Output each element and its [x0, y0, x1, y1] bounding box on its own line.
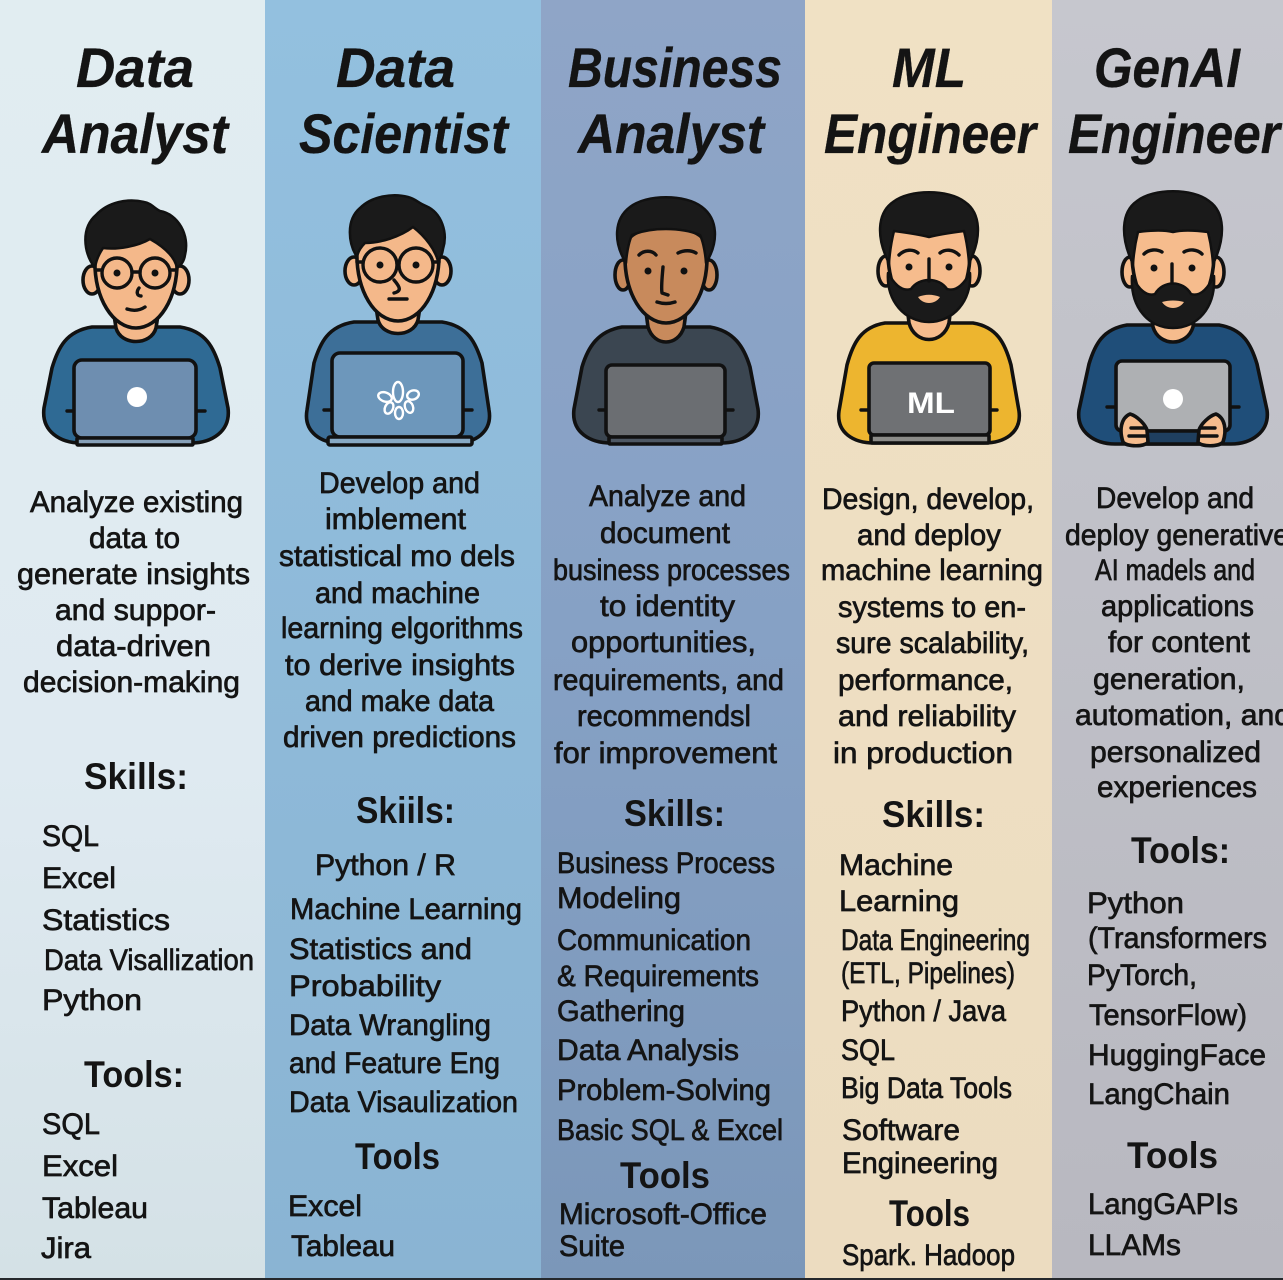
column background — [541, 0, 805, 1280]
heading: GenAI Engineer: GenAI — [1094, 36, 1241, 99]
description: recommendsl — [577, 700, 751, 733]
skills list: Communication — [557, 924, 751, 957]
description: in production — [833, 737, 1013, 770]
skills list: (ETL, Pipelines) — [841, 957, 1015, 990]
description: Develop and — [319, 467, 480, 500]
tools list — [559, 1155, 767, 1263]
heading: Data Analyst — [40, 36, 230, 165]
tools list one — [1087, 830, 1267, 1111]
skills list: Skills: — [624, 793, 725, 834]
description: for improvement — [554, 737, 778, 770]
tools list — [842, 1193, 1015, 1272]
tools list one: HuggingFace — [1088, 1039, 1266, 1072]
description: systems to en- — [838, 591, 1026, 624]
laptop label: ML: ML — [907, 387, 955, 420]
skills list: Data Analysis — [557, 1034, 739, 1067]
heading: ML Engineer: Engineer — [824, 102, 1039, 165]
heading: Business Analyst: Business — [568, 36, 782, 99]
heading: Business Analyst: Analyst — [576, 102, 766, 165]
icon: analyst with laptop — [44, 201, 228, 445]
description: data-driven — [56, 630, 211, 663]
description: to identity — [600, 590, 735, 623]
description — [279, 467, 523, 754]
tools list: Suite — [559, 1230, 625, 1263]
column background — [265, 0, 541, 1280]
skills list: Business Process — [557, 847, 775, 880]
description: driven predictions — [283, 721, 516, 754]
tools list: Tools — [620, 1155, 710, 1196]
tools list: Tools — [355, 1136, 440, 1177]
description: and make data — [305, 685, 494, 718]
description: decision-making — [23, 666, 240, 699]
tools list: Spark. Hadoop — [842, 1239, 1015, 1272]
description: learning elgorithms — [281, 612, 523, 645]
skills list — [42, 756, 254, 1017]
skills list: Data Engineering — [841, 924, 1030, 957]
tools list: Tools: — [84, 1054, 184, 1095]
description: machine learning — [821, 554, 1043, 587]
column background — [805, 0, 1052, 1280]
tools list one: Tools: — [1131, 830, 1230, 871]
description: data to — [89, 522, 180, 555]
tools list one: (Transformers — [1088, 922, 1267, 955]
tools list one: LangChain — [1088, 1078, 1230, 1111]
skills list: SQL — [841, 1034, 895, 1067]
tools list: Tableau — [42, 1192, 148, 1225]
tools list two — [1088, 1135, 1238, 1262]
description: experiences — [1097, 771, 1257, 804]
skills list: Engineering — [842, 1147, 998, 1180]
skills list: & Requirements — [557, 960, 759, 993]
description: statistical mo dels — [279, 540, 515, 573]
skills list: Python / R — [315, 849, 456, 882]
panel: Business Analyst — [541, 0, 805, 1280]
panel: Data Scientist — [265, 0, 541, 1280]
description: and reliability — [838, 700, 1016, 733]
skills list — [557, 793, 783, 1147]
heading: GenAI Engineer — [1068, 36, 1283, 165]
description: opportunities, — [571, 626, 756, 659]
heading: Business Analyst — [568, 36, 782, 165]
tools list one: PyTorch, — [1087, 959, 1197, 992]
tools list two: LLAMs — [1088, 1229, 1181, 1262]
skills list: SQL — [42, 820, 99, 853]
description: document — [600, 517, 731, 550]
description: for content — [1108, 626, 1251, 659]
description: and suppor- — [55, 594, 216, 627]
heading: Data Analyst: Data — [76, 36, 194, 99]
skills list: Problem-Solving — [557, 1074, 771, 1107]
tools list: Excel — [42, 1150, 118, 1183]
skills list: Modeling — [557, 882, 681, 915]
skills list: Machine — [839, 849, 953, 882]
tools list — [41, 1054, 184, 1265]
skills list: Skills: — [882, 794, 985, 835]
tools list: Jira — [41, 1232, 91, 1265]
description: imblement — [325, 503, 467, 536]
skills list: Skiils: — [356, 790, 455, 831]
icon: GenAI engineer with tablet — [1079, 191, 1267, 446]
description: generation, — [1093, 663, 1245, 696]
skills list: Skills: — [84, 756, 188, 797]
tools list — [288, 1136, 440, 1263]
icon: business analyst with laptop — [574, 197, 758, 444]
description: AI madels and — [1095, 554, 1255, 587]
skills list — [289, 790, 522, 1119]
description: Analyze and — [589, 480, 746, 513]
panel: ML Engineer — [805, 0, 1052, 1280]
skills list: Machine Learning — [290, 893, 522, 926]
description: and machine — [315, 577, 480, 610]
description: Analyze existing — [30, 486, 243, 519]
tools list: Tableau — [291, 1230, 395, 1263]
icon: scientist with laptop — [306, 195, 490, 445]
skills list: Data Visaulization — [289, 1086, 518, 1119]
skills list: Python — [42, 984, 142, 1017]
description: sure scalability, — [836, 627, 1029, 660]
panel: GenAI Engineer — [1052, 0, 1283, 1280]
description — [821, 483, 1043, 770]
heading: ML Engineer — [824, 36, 1039, 165]
skills list: Data Visallization — [44, 944, 254, 977]
skills list: Gathering — [557, 995, 685, 1028]
skills list: Statistics — [42, 904, 170, 937]
icon: atom logo on laptop — [377, 382, 420, 419]
icon: ML engineer with laptop — [839, 192, 1019, 443]
description: business processes — [553, 554, 790, 587]
description: performance, — [838, 664, 1013, 697]
description: personalized — [1090, 736, 1261, 769]
skills list: Big Data Tools — [841, 1072, 1012, 1105]
heading: Data Scientist: Data — [336, 36, 455, 99]
description: and deploy — [857, 519, 1001, 552]
heading: ML Engineer: ML — [892, 36, 966, 99]
skills list: Software — [842, 1114, 960, 1147]
heading: Data Analyst: Analyst — [40, 102, 230, 165]
description — [553, 480, 790, 770]
tools list one: Python — [1087, 887, 1184, 920]
skills list: Statistics and — [289, 933, 472, 966]
tools list two: Tools — [1127, 1135, 1218, 1176]
skills list: and Feature Eng — [289, 1047, 500, 1080]
heading: Data Scientist: Scientist — [299, 102, 510, 165]
tools list one: TensorFlow) — [1089, 999, 1247, 1032]
skills list — [839, 794, 1030, 1180]
tools list: SQL — [42, 1108, 100, 1141]
tools list: Tools — [889, 1193, 970, 1234]
description: requirements, and — [553, 664, 784, 697]
description — [1065, 482, 1283, 804]
skills list: Learning — [839, 885, 959, 918]
description: applications — [1101, 590, 1254, 623]
column background — [0, 0, 265, 1280]
panel: Data Analyst — [0, 0, 265, 1280]
heading: Data Scientist — [299, 36, 510, 165]
description: Develop and — [1096, 482, 1254, 515]
skills list: Data Wrangling — [289, 1009, 491, 1042]
skills list: Basic SQL & Excel — [557, 1114, 783, 1147]
description: Design, develop, — [822, 483, 1034, 516]
tools list: Excel — [288, 1190, 362, 1223]
tools list: Microsoft-Office — [559, 1198, 767, 1231]
description — [17, 486, 250, 699]
description: to derive insights — [285, 649, 515, 682]
column background — [1052, 0, 1283, 1280]
skills list: Excel — [42, 862, 116, 895]
skills list: Python / Java — [841, 995, 1006, 1028]
tools list two: LangGAPIs — [1088, 1188, 1238, 1221]
skills list: Probability — [289, 970, 441, 1003]
description: generate insights — [17, 558, 250, 591]
